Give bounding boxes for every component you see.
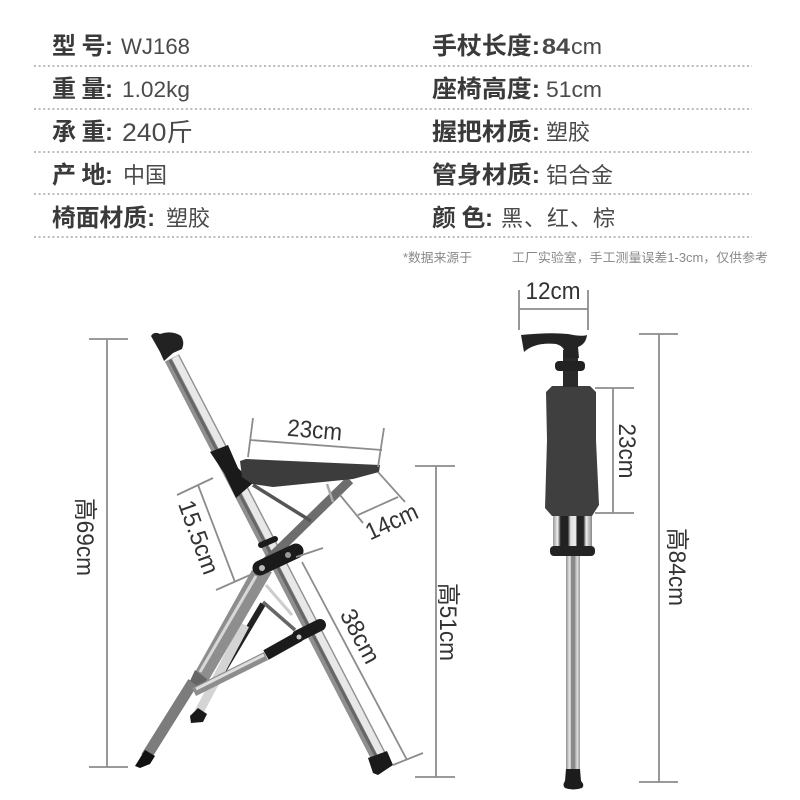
label: 23cm vertical: 23cm: [613, 424, 640, 478]
spec: seat height: [432, 75, 602, 103]
spec: origin: 产 地:: [52, 162, 113, 189]
label: height 84cm: 高84cm: [663, 528, 690, 606]
chair: seat: [240, 459, 380, 487]
label: 15.5cm: 15.5cm: [172, 497, 224, 578]
folded cane photo: [521, 333, 599, 790]
spec table: [52, 33, 615, 232]
chair: light brace: [266, 585, 292, 615]
chair: main bracket: [259, 551, 296, 571]
label: 23cm: 23cm: [286, 415, 343, 446]
chair: small collar: [261, 539, 275, 545]
cane: collar: [550, 546, 595, 556]
spec: grip material: [432, 119, 590, 146]
spec: seat material: [52, 205, 210, 232]
chair: main foot: [368, 751, 393, 775]
spec: tube material: 铝合金: [546, 163, 613, 188]
spec: colour: 黑、红、棕: [501, 206, 615, 231]
spec: weight: 重 量:: [52, 76, 113, 103]
cane: neck ring: [555, 361, 585, 371]
chair: lower latch: [266, 625, 320, 655]
chair: seat brace: [253, 485, 311, 521]
spec: load: 承 重:: [52, 119, 113, 146]
dimensions on chair: [71, 339, 461, 777]
dimensions on cane: [519, 278, 690, 782]
cane: seat folded: [545, 386, 599, 516]
38cm line: [302, 562, 423, 765]
chair: horizontal lower brace: [194, 655, 266, 692]
23cm line: [595, 388, 634, 513]
spec: model: WJ168: [121, 34, 190, 59]
label: height 51cm: 高51cm: [434, 583, 461, 661]
spec: origin: [52, 162, 167, 189]
spec: model: [52, 33, 190, 60]
chair: hinge wire: [327, 484, 333, 502]
chair: front foot: [135, 750, 155, 768]
cane: cylinders: [553, 516, 592, 548]
cane: foot: [564, 769, 583, 790]
spec: seat height: 座椅高度:: [432, 75, 540, 103]
cane: handle: [521, 333, 587, 358]
spec: colour: 颜 色:: [432, 205, 493, 232]
seat depth line: [340, 472, 405, 523]
spec: grip material: 握把材质:: [432, 119, 540, 146]
cane: pole: [566, 556, 580, 772]
height 69cm line: [89, 339, 128, 767]
label: 14cm: 14cm: [361, 498, 422, 546]
spec: weight: 1.02kg: [122, 77, 190, 102]
chair: seat clamp: [210, 445, 253, 498]
chair: front leg: [146, 570, 272, 757]
seat width line: [248, 418, 384, 467]
footnote: 工厂实验室，手工测量误差1-3cm，仅供参考: [512, 250, 768, 265]
chair: front leg upper strut: [262, 480, 350, 566]
spec: cane length: [432, 33, 602, 60]
spec: load: [52, 119, 193, 147]
spec: colour: [432, 205, 615, 232]
spec: cane length: cm: [571, 34, 602, 59]
spec: cane length: 手杖长度:: [432, 33, 540, 60]
spec: tube material: 管身材质:: [432, 162, 540, 189]
spec: weight: [52, 76, 190, 103]
spec: seat height: 51cm: [546, 77, 602, 102]
chair: rear short leg: [190, 604, 263, 723]
height 51cm line: [415, 466, 455, 777]
chair: thin diagonal brace: [263, 602, 295, 630]
label: 38cm: 38cm: [334, 605, 385, 668]
footnote: [403, 250, 768, 265]
label: 12cm: 12cm: [526, 278, 580, 305]
spec: seat material: 塑胶: [166, 206, 210, 231]
footnote: *数据来源于: [403, 250, 472, 265]
chair: main tube: [170, 357, 382, 758]
label: height 69cm: 高69cm: [71, 498, 98, 576]
spec: seat material: 椅面材质:: [52, 205, 155, 232]
folding chair photo: [135, 332, 393, 775]
spec: grip material: 塑胶: [546, 120, 590, 145]
spec: origin: 中国: [123, 163, 167, 188]
spec: load: 240斤: [122, 119, 193, 147]
chair: grip: [151, 332, 183, 361]
spec: model: 型 号:: [52, 33, 113, 60]
12cm line: [519, 290, 588, 330]
15.5cm line: [177, 478, 323, 590]
spec: tube material: [432, 162, 613, 189]
height 84cm line: [639, 334, 678, 782]
spec: cane length: 84: [542, 34, 571, 59]
cane: neck: [563, 350, 578, 387]
